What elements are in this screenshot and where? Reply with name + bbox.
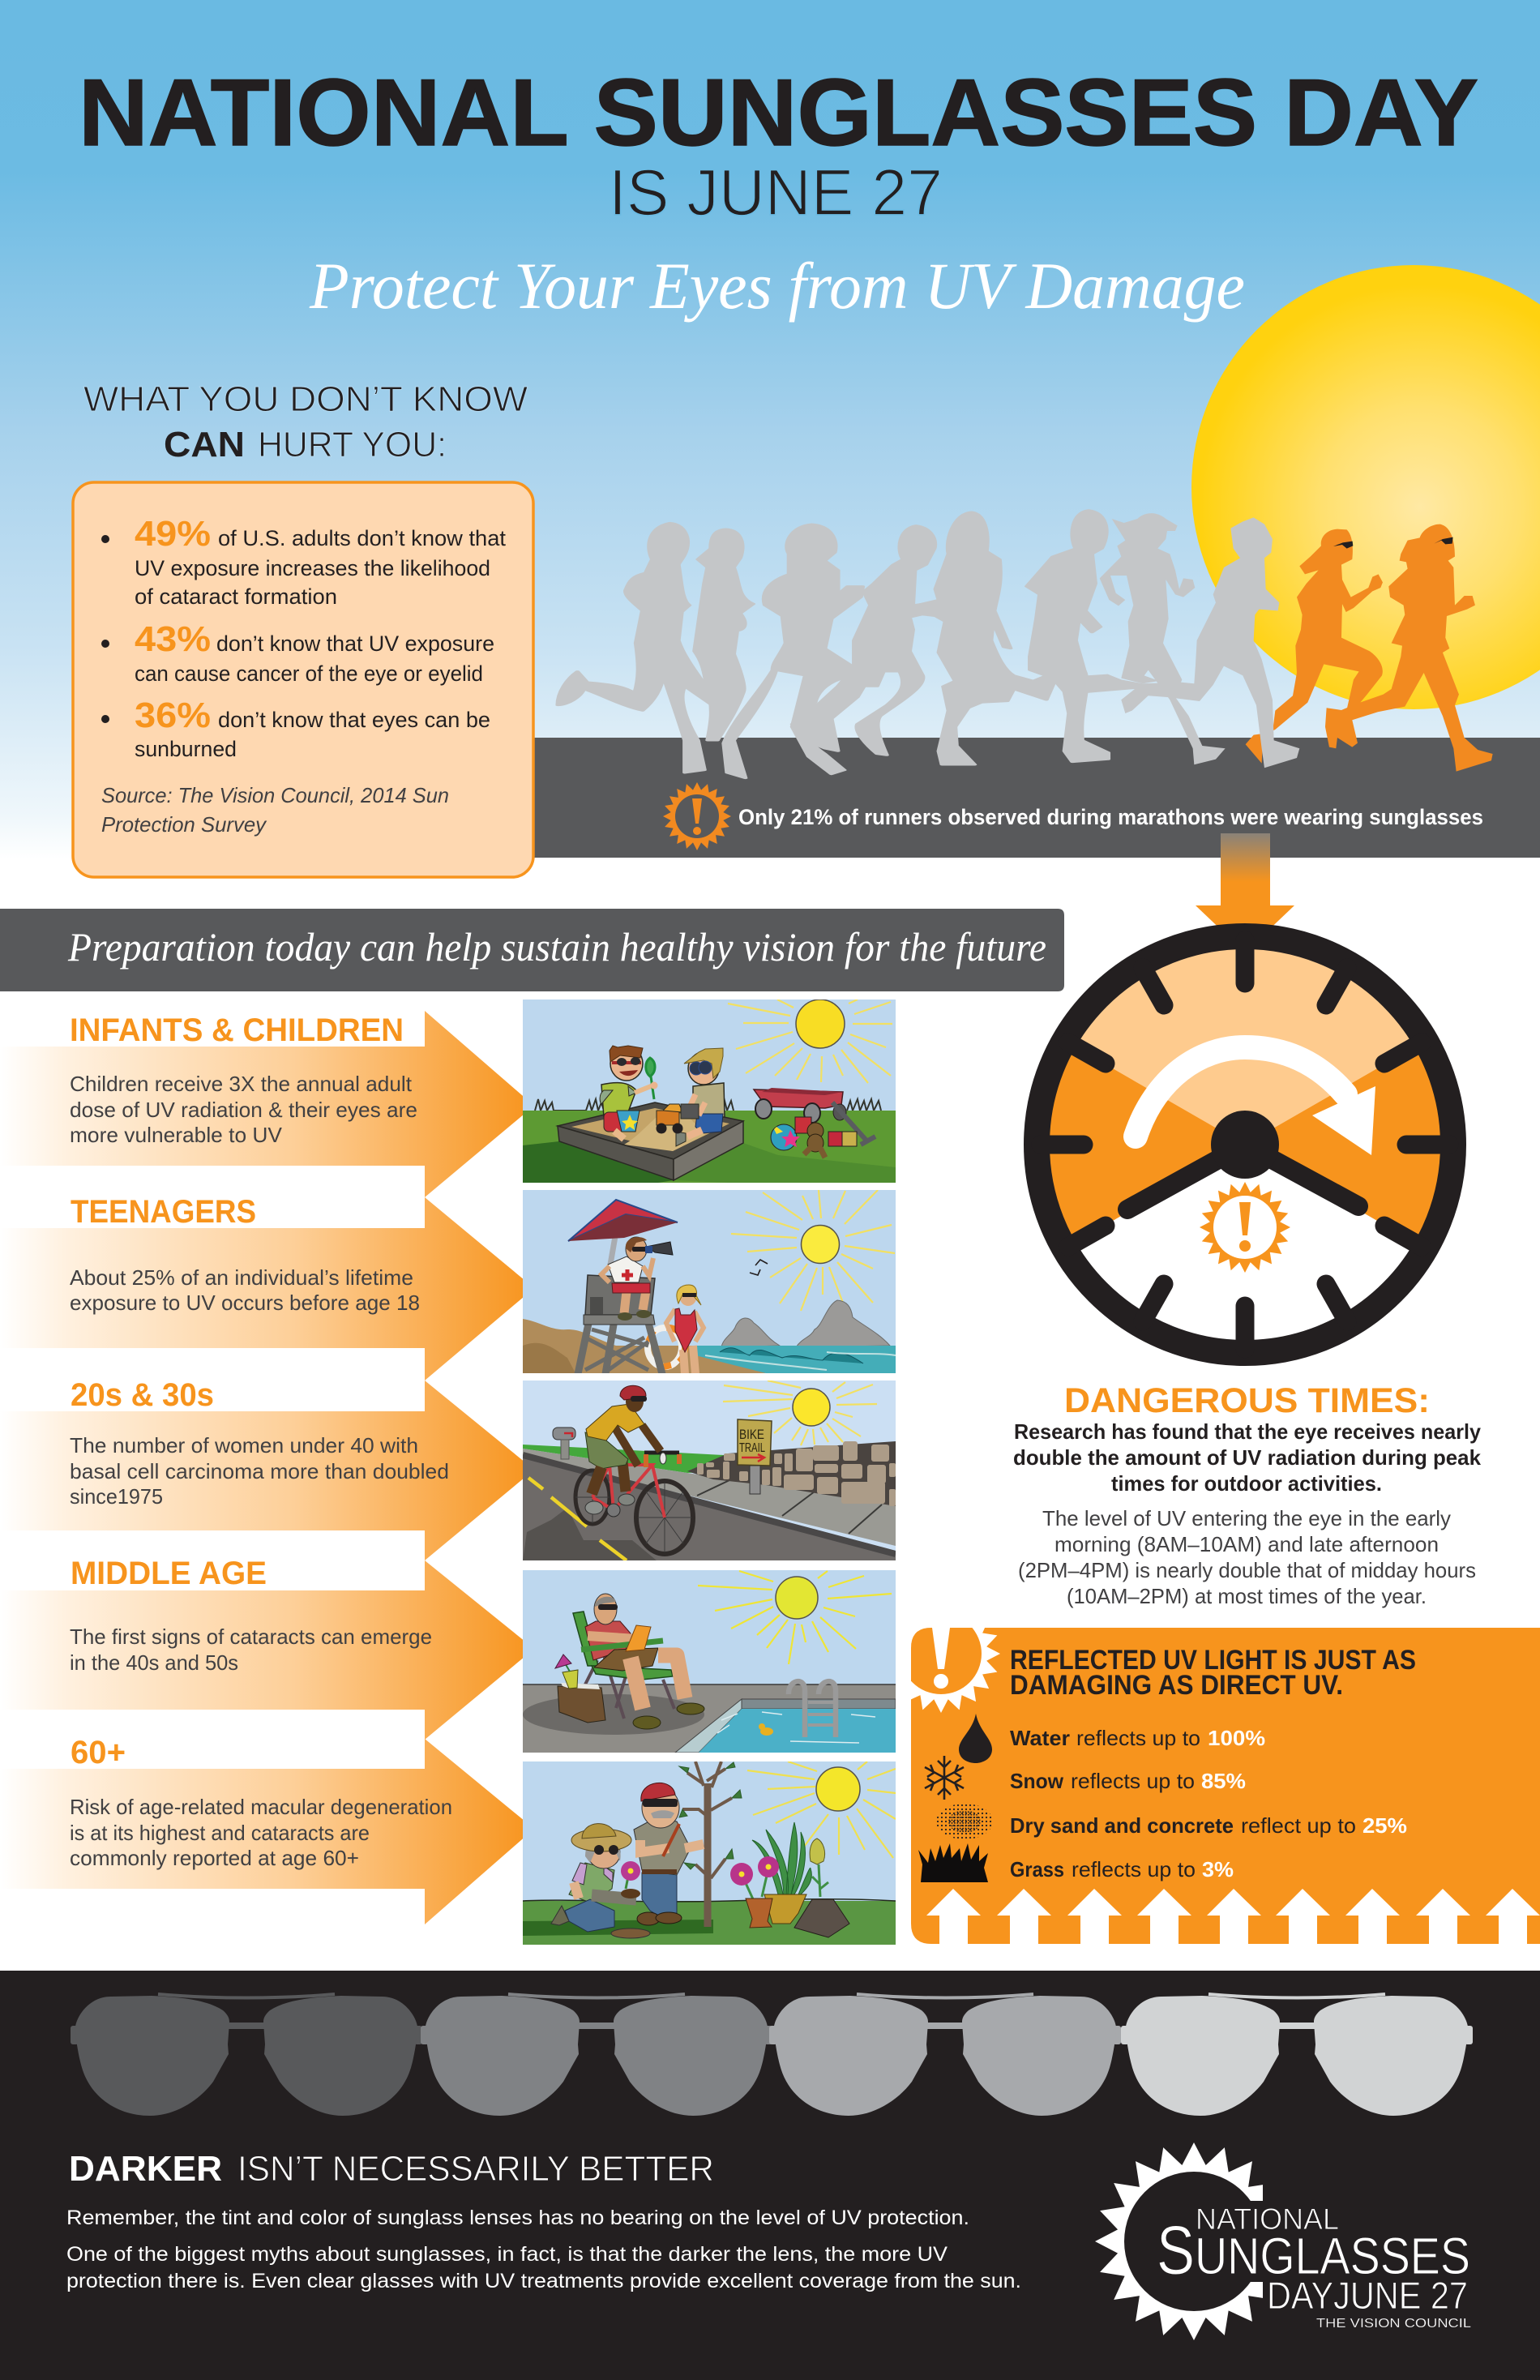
subtitle: date: IS JUNE 27 bbox=[609, 156, 943, 229]
row: grass: 3% bbox=[1202, 1857, 1234, 1881]
life stage: 60 plus: 60+ bbox=[71, 1735, 126, 1770]
runners bbox=[558, 510, 1493, 778]
row: water: Water bbox=[1010, 1726, 1070, 1750]
stat 43%: can cause cancer of the eye or eyelid bbox=[135, 661, 483, 686]
up arrows bbox=[926, 1889, 1540, 1944]
stat 49% bbox=[101, 514, 506, 609]
sunglasses: dark bbox=[421, 1994, 772, 2116]
stat 49%: 49% bbox=[135, 514, 211, 554]
illustration: cyclist: BIKE bbox=[739, 1427, 764, 1442]
life stage: infants and children bbox=[0, 1011, 534, 1197]
icon: water drop bbox=[959, 1714, 992, 1763]
row: water: 100% bbox=[1208, 1726, 1265, 1750]
background: sky bbox=[0, 0, 1540, 859]
stat 36%: don’t know that eyes can be bbox=[218, 708, 490, 732]
panel heading: DAMAGING AS DIRECT UV. bbox=[1010, 1670, 1343, 1701]
text: darker body: Remember, the tint and color of sunglass lenses has no bearing on the level of UV protection. bbox=[66, 2207, 969, 2229]
illustration: man by pool bbox=[523, 1570, 896, 1753]
illustration: teen lifeguard at beach bbox=[523, 1190, 896, 1374]
road bbox=[533, 738, 1540, 858]
icon: warning sun on road bbox=[663, 782, 731, 850]
logo: national sunglasses day: NATIONAL bbox=[1196, 2202, 1339, 2236]
icon: sand bbox=[936, 1804, 993, 1839]
clock: dangerous times bbox=[1035, 935, 1455, 1354]
heading: what you don't know bbox=[83, 379, 528, 464]
text: dangerous times bold bbox=[1013, 1419, 1482, 1496]
stat 43% bbox=[101, 619, 494, 686]
life stage: teenagers: About 25% of an individual’s lifetime bbox=[70, 1265, 413, 1290]
row: water: reflects up to bbox=[1076, 1726, 1200, 1750]
panel heading: REFLECTED UV LIGHT IS JUST AS bbox=[1010, 1645, 1416, 1676]
stat 49%: of U.S. adults don’t know that bbox=[218, 526, 506, 550]
life stage: 60 plus: is at its highest and cataracts are bbox=[70, 1821, 370, 1845]
stat 43%: 43% bbox=[135, 619, 211, 659]
stat 43%: don’t know that UV exposure bbox=[216, 631, 494, 656]
icon: warning sun bbox=[1200, 1182, 1290, 1273]
row: dry sand and concrete: Dry sand and concrete bbox=[1010, 1813, 1234, 1838]
life stage: teenagers: TEENAGERS bbox=[71, 1194, 256, 1230]
life stage: middle age bbox=[0, 1556, 534, 1740]
life stage: 20s and 30s: The number of women under 40 with bbox=[70, 1433, 418, 1458]
row: grass: reflects up to bbox=[1072, 1857, 1196, 1881]
sunglasses: light bbox=[1121, 1994, 1473, 2116]
row: grass: Grass bbox=[1010, 1857, 1064, 1881]
life stage: 60 plus: Risk of age-related macular degeneration bbox=[70, 1795, 452, 1819]
clock rim bbox=[1037, 936, 1453, 1353]
row: snow: reflects up to bbox=[1071, 1769, 1195, 1793]
life stage: teenagers bbox=[0, 1194, 534, 1380]
title: NATIONAL SUNGLASSES DAY bbox=[79, 59, 1478, 165]
stat 36%: 36% bbox=[135, 696, 211, 735]
sun bbox=[1191, 265, 1540, 709]
sunglasses: medium bbox=[769, 1994, 1121, 2116]
icon: grass bbox=[918, 1843, 988, 1882]
clock sectors bbox=[1035, 935, 1455, 1354]
life stage: infants and children: Children receive 3X the annual adult bbox=[70, 1072, 413, 1096]
stat 36%: sunburned bbox=[135, 737, 237, 761]
life stage: infants and children: INFANTS & CHILDREN bbox=[70, 1012, 404, 1048]
heading: dangerous times: DANGEROUS TIMES: bbox=[1064, 1381, 1430, 1420]
life stage: middle age: MIDDLE AGE bbox=[71, 1556, 267, 1591]
heading: what you don't know: CAN bbox=[164, 425, 245, 464]
row: dry sand and concrete bbox=[1010, 1813, 1407, 1838]
stat 49%: UV exposure increases the likelihood bbox=[135, 556, 490, 580]
logo: national sunglasses day: DAYJUNE 27 bbox=[1267, 2274, 1468, 2317]
life stage: 60 plus: commonly reported at age 60+ bbox=[70, 1846, 359, 1870]
gray runners right and orange runners with sunglasses bbox=[1086, 513, 1493, 772]
row: snow: 85% bbox=[1201, 1769, 1246, 1793]
heading: what you don't know: WHAT YOU DON’T KNOW bbox=[83, 379, 528, 419]
clock hands bbox=[1127, 1145, 1358, 1209]
row: water bbox=[1010, 1726, 1265, 1750]
text: dangerous times detail: (10AM–2PM) at most times of the year. bbox=[1067, 1584, 1427, 1608]
row: snow bbox=[1010, 1769, 1246, 1793]
illustration: cyclist: TRAIL bbox=[739, 1441, 765, 1455]
life stage: infants and children: more vulnerable to UV bbox=[70, 1123, 283, 1147]
stat 36% bbox=[101, 696, 490, 761]
text: dangerous times detail: morning (8AM–10AM) and late afternoon bbox=[1054, 1532, 1439, 1556]
text: darker body bbox=[66, 2207, 1021, 2292]
title bbox=[79, 59, 1478, 229]
row: dry sand and concrete: reflect up to bbox=[1241, 1813, 1356, 1838]
text: dangerous times bold: double the amount of UV radiation during peak bbox=[1013, 1445, 1482, 1470]
text: dangerous times bold: Research has found that the eye receives nearly bbox=[1014, 1419, 1482, 1444]
logo: national sunglasses day: UNGLASSES bbox=[1195, 2227, 1470, 2285]
panel: statistics box bbox=[73, 482, 533, 877]
panel: reflected UV bbox=[911, 1628, 1540, 1944]
text: dangerous times detail: The level of UV entering the eye in the early bbox=[1042, 1506, 1451, 1530]
tagline: Protect Your Eyes from UV Damage bbox=[309, 249, 1245, 323]
banner: preparation bbox=[0, 909, 1064, 991]
source: Source: The Vision Council, 2014 Sun bbox=[101, 783, 449, 807]
life stage: 20s and 30s bbox=[0, 1377, 534, 1560]
panel heading bbox=[1010, 1645, 1416, 1701]
life stage: 20s and 30s: basal cell carcinoma more than doubled bbox=[70, 1459, 449, 1483]
gray runners left bbox=[558, 510, 1108, 778]
banner: preparation: Preparation today can help sustain healthy vision for the future bbox=[67, 924, 1046, 970]
row: dry sand and concrete: 25% bbox=[1362, 1813, 1407, 1838]
life stage: 60 plus bbox=[0, 1735, 534, 1924]
life stage: infants and children: dose of UV radiation & their eyes are bbox=[70, 1098, 417, 1122]
row: snow: Snow bbox=[1010, 1769, 1064, 1793]
icon: warning sun corner bbox=[911, 1628, 1000, 1713]
text: dangerous times detail bbox=[1018, 1506, 1476, 1608]
road caption: Only 21% of runners observed during marathons were wearing sunglasses bbox=[738, 805, 1483, 829]
text: dangerous times bold: times for outdoor activities. bbox=[1111, 1471, 1382, 1496]
stat 49%: of cataract formation bbox=[135, 584, 337, 609]
heading: what you don't know: HURT YOU: bbox=[258, 425, 447, 464]
logo: national sunglasses day bbox=[1095, 2142, 1471, 2340]
arrow: road to clock bbox=[1196, 833, 1294, 952]
illustration: cyclist bbox=[523, 1380, 896, 1560]
illustration: children in sandbox bbox=[523, 1000, 896, 1183]
icon: snowflake bbox=[925, 1756, 964, 1800]
clock ticks bbox=[1041, 940, 1449, 1349]
text: darker body: One of the biggest myths about sunglasses, in fact, is that the darker the lens, the more UV bbox=[66, 2243, 948, 2266]
illustration: seniors gardening bbox=[523, 1761, 896, 1945]
curved white arrow bbox=[1136, 1047, 1375, 1155]
text: darker body: protection there is. Even clear glasses with UV treatments provide excellent coverage from the sun. bbox=[66, 2270, 1021, 2292]
life stage: 20s and 30s: 20s & 30s bbox=[71, 1377, 214, 1413]
logo: national sunglasses day: THE VISION COUNCIL bbox=[1316, 2317, 1471, 2331]
panel: darker section bbox=[0, 1971, 1540, 2380]
source: Protection Survey bbox=[101, 812, 267, 837]
logo: national sunglasses day: S bbox=[1157, 2212, 1195, 2289]
life stage: 20s and 30s: since1975 bbox=[70, 1484, 163, 1509]
life stage: middle age: in the 40s and 50s bbox=[70, 1650, 238, 1675]
heading: darker: ISN’T NECESSARILY BETTER bbox=[237, 2149, 714, 2189]
sunglasses: darkest bbox=[71, 1994, 422, 2116]
life stage: middle age: The first signs of cataracts can emerge bbox=[70, 1624, 432, 1649]
source bbox=[101, 783, 449, 837]
heading: darker: DARKER bbox=[69, 2149, 222, 2189]
row: grass bbox=[1010, 1857, 1234, 1881]
text: dangerous times detail: (2PM–4PM) is nearly double that of midday hours bbox=[1018, 1558, 1476, 1582]
life stage: teenagers: exposure to UV occurs before age 18 bbox=[70, 1291, 420, 1315]
